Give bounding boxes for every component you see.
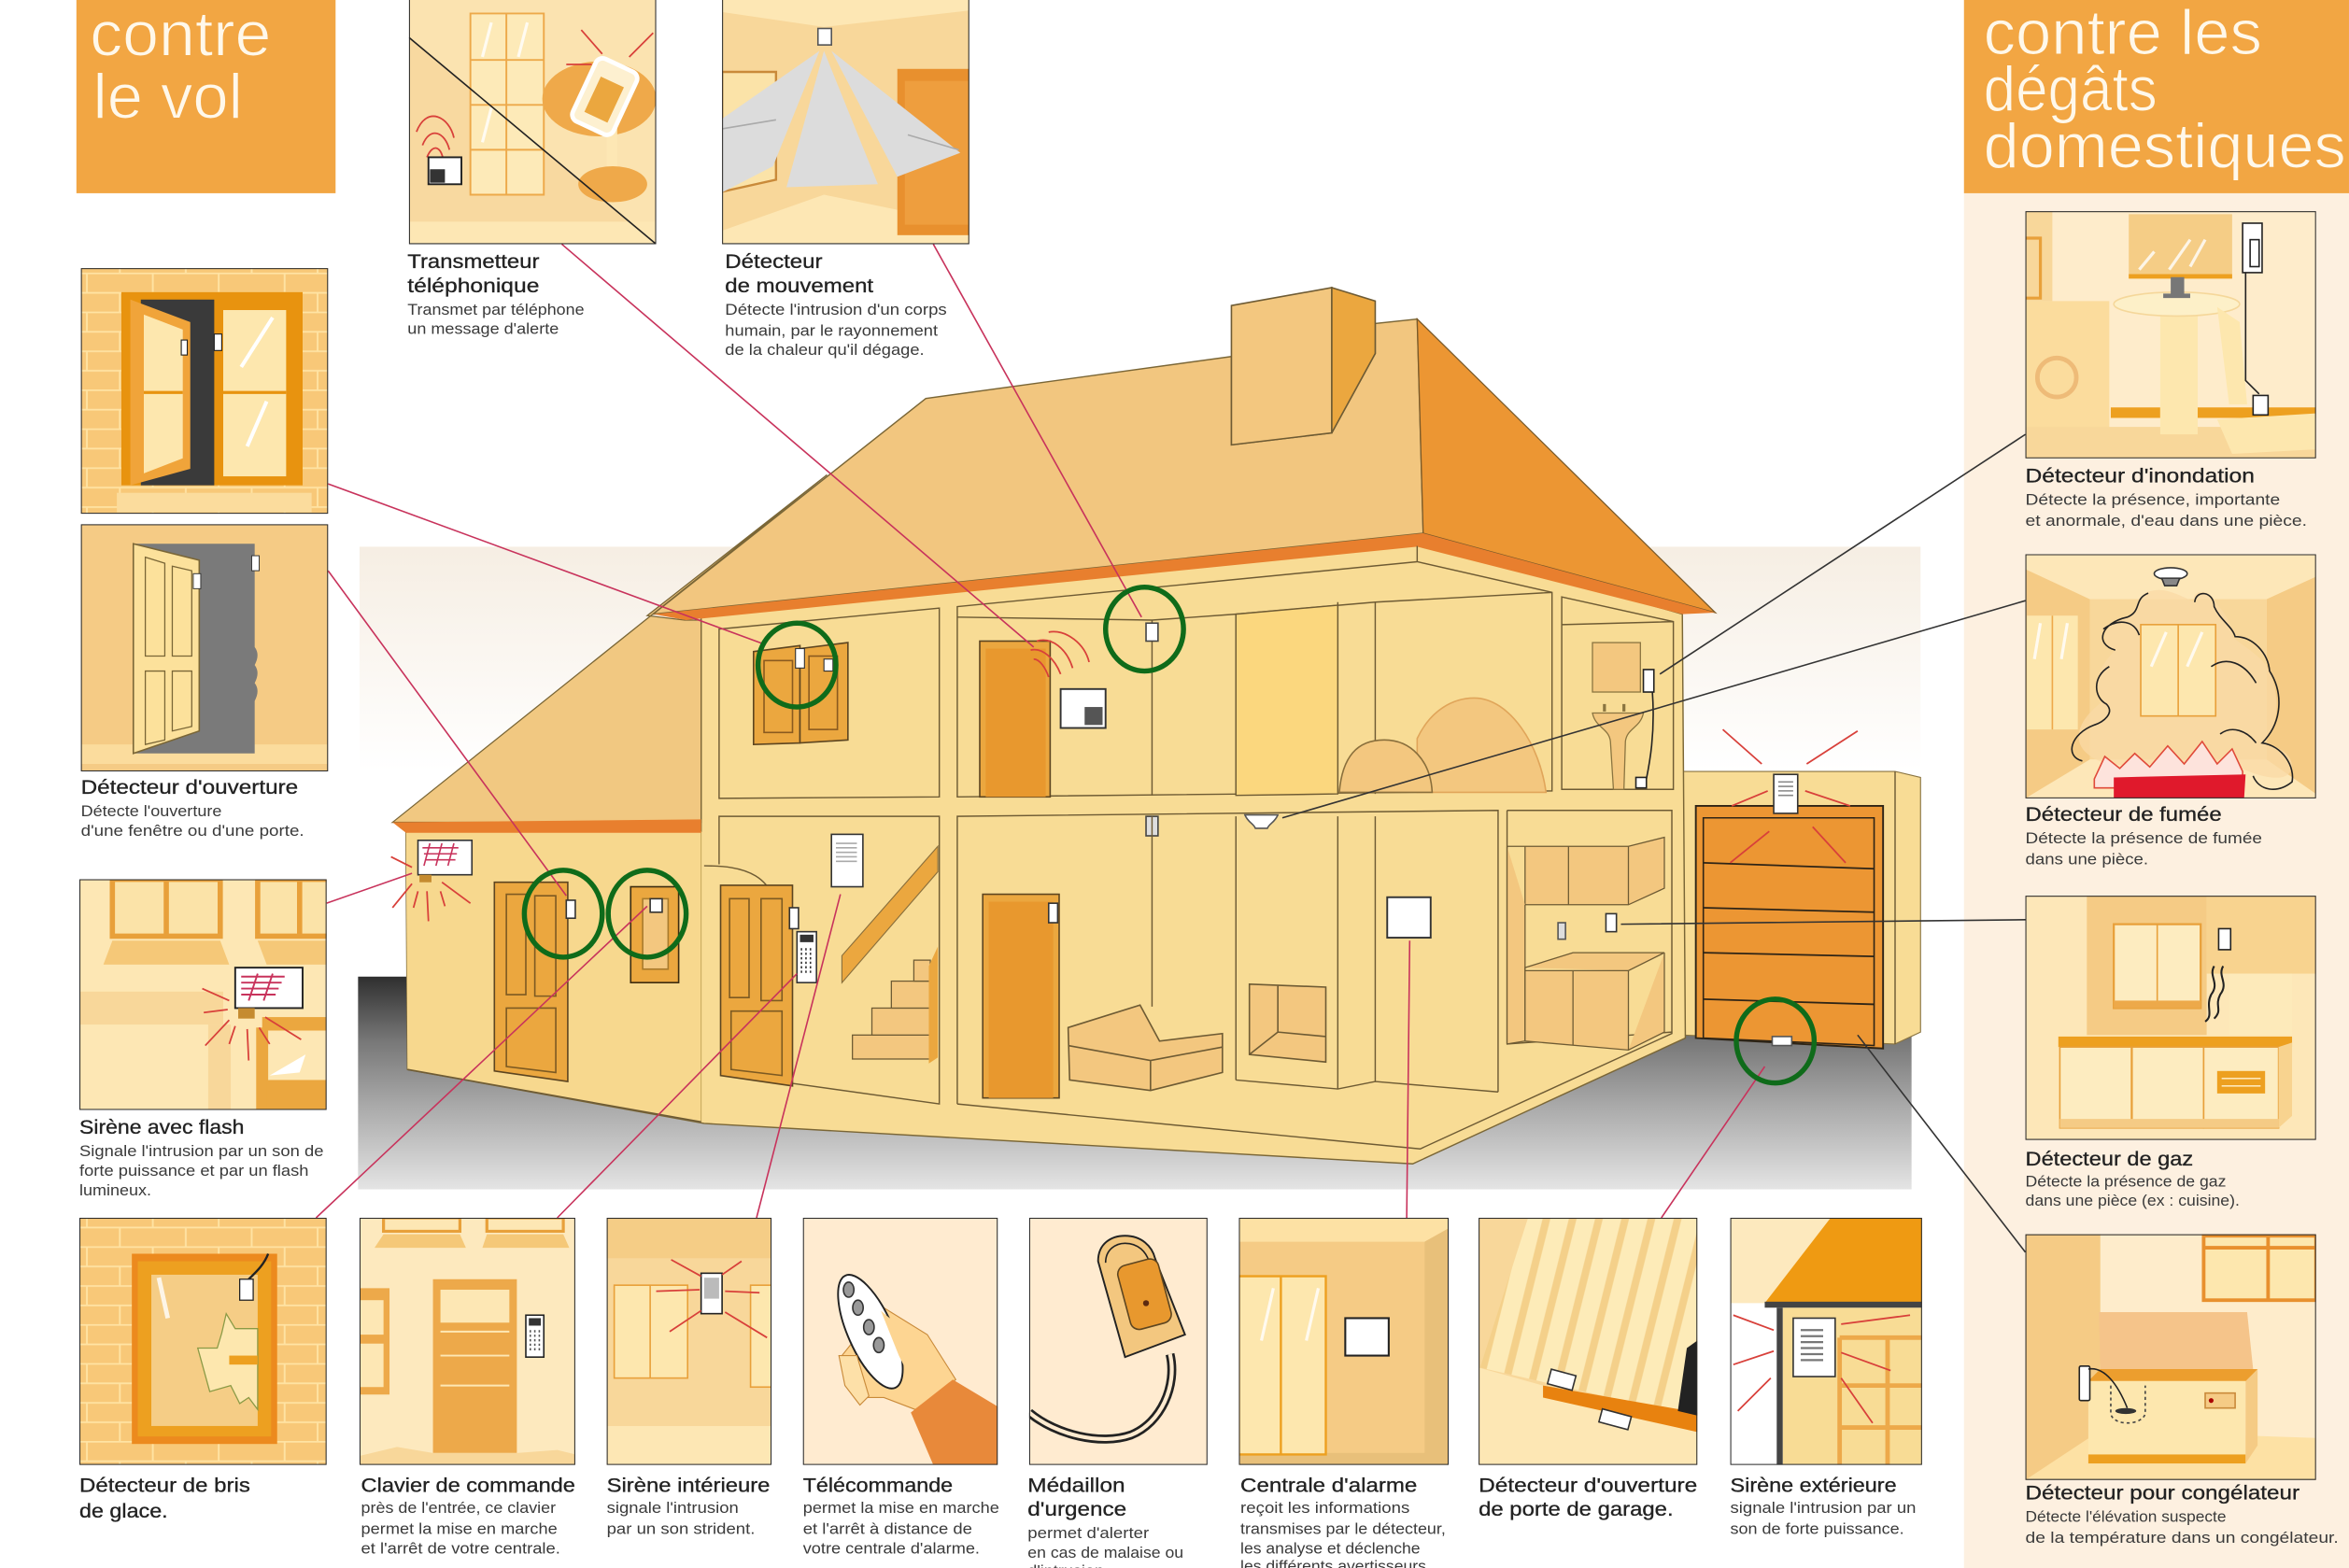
interior siren xyxy=(831,834,863,887)
garage door sensor xyxy=(1772,1037,1791,1046)
panel: médaillon d'urgence xyxy=(1029,1218,1208,1465)
gas detector xyxy=(1606,913,1617,932)
roof hip xyxy=(1417,319,1716,613)
text: détecteur de mouvement xyxy=(725,249,947,359)
text: porte de garage: de porte de garage. xyxy=(1479,1497,1674,1520)
text: télécommande: et l'arrêt à distance de xyxy=(803,1519,972,1537)
text: transmetteur téléphonique: Transmetteur xyxy=(407,249,539,273)
sofa xyxy=(1068,1005,1223,1091)
header: contre le vol: le vol xyxy=(92,63,243,133)
text: centrale d'alarme: transmises par le détecteur, xyxy=(1240,1519,1446,1537)
text: porte de garage: Détecteur d'ouverture xyxy=(1479,1474,1697,1497)
leader lines xyxy=(316,244,2026,1252)
text: sirène avec flash xyxy=(79,1115,323,1199)
text: détecteur de gaz xyxy=(2026,1147,2240,1209)
niche xyxy=(1250,984,1325,1062)
chimney xyxy=(1231,288,1375,445)
header: contre le vol: contre xyxy=(90,0,271,69)
smoke detector xyxy=(1245,815,1278,828)
text: détecteur de gaz: Détecteur de gaz xyxy=(2026,1147,2193,1170)
door sensors xyxy=(566,898,1057,928)
exterior siren with flash xyxy=(391,841,472,921)
text: centrale d'alarme: Centrale d'alarme xyxy=(1240,1474,1417,1497)
text: sirène intérieure: Sirène intérieure xyxy=(607,1474,770,1497)
small window xyxy=(630,887,679,982)
text: clavier de commande: permet la mise en marche xyxy=(361,1519,558,1537)
text: détecteur d'inondation xyxy=(2026,463,2307,530)
garage xyxy=(1682,729,1920,1049)
text: détecteur de fumée: dans une pièce. xyxy=(2026,850,2148,868)
text: détecteur de fumée: Détecte la présence de fumée xyxy=(2026,829,2262,847)
panel: porte de garage xyxy=(1479,1218,1698,1465)
stairs xyxy=(842,846,938,1064)
text: détecteur d'ouverture xyxy=(81,775,304,840)
panel: télécommande xyxy=(803,1218,998,1465)
main roof front xyxy=(653,319,1423,614)
panel: bris de glace xyxy=(79,1218,327,1465)
panel: porte ouverte xyxy=(80,524,329,771)
upper left window with sensors xyxy=(754,643,848,744)
panel: sirène extérieure xyxy=(1730,1218,1922,1465)
text: sirène avec flash: Signale l'intrusion par un son de xyxy=(79,1142,323,1160)
text: sirène extérieure: son de forte puissance. xyxy=(1731,1519,1904,1537)
text: détecteur pour congélateur xyxy=(2026,1481,2339,1547)
text: sirène extérieure: Sirène extérieure xyxy=(1731,1474,1897,1497)
text: télécommande: permet la mise en marche xyxy=(803,1499,999,1517)
panel: transmetteur téléphonique xyxy=(409,0,657,245)
text: centrale d'alarme xyxy=(1240,1474,1446,1568)
text: détecteur d'ouverture: Détecte l'ouverture xyxy=(81,802,221,820)
motion detector lower xyxy=(1146,816,1158,836)
text: sirène intérieure: signale l'intrusion xyxy=(607,1499,739,1517)
floor slab and lower rooms xyxy=(704,811,1672,1149)
text: bris de glace: Détecteur de bris xyxy=(79,1474,250,1497)
bathroom fixtures xyxy=(1592,643,1654,789)
kitchen sensor xyxy=(1558,923,1565,939)
text: détecteur de mouvement: Détecteur xyxy=(725,249,823,273)
text: sirène avec flash: forte puissance et par un flash xyxy=(79,1162,308,1180)
text: détecteur de mouvement: de la chaleur qu'il dégage. xyxy=(725,341,925,359)
text: bris de glace xyxy=(79,1474,250,1522)
text: sirène intérieure: par un son strident. xyxy=(607,1519,755,1537)
house illustration xyxy=(391,288,1920,1164)
panel: détecteur pour congélateur xyxy=(2025,1235,2316,1480)
text: détecteur d'inondation: Détecteur d'inondation xyxy=(2026,463,2255,487)
text: transmetteur téléphonique: un message d'alerte xyxy=(407,320,559,338)
right column background xyxy=(1964,193,2349,1568)
telephone transmitter xyxy=(1031,631,1106,728)
text: clavier de commande xyxy=(361,1474,575,1557)
panel: détecteur de gaz xyxy=(2025,896,2316,1140)
text: télécommande: votre centrale d'alarme. xyxy=(803,1539,980,1557)
front door 1 xyxy=(494,883,568,1081)
panel: sirène avec flash xyxy=(79,880,327,1109)
lower interior door xyxy=(983,895,1059,1098)
eave fascia xyxy=(653,533,1716,620)
alarm control panel xyxy=(1387,897,1431,938)
kitchen xyxy=(1507,838,1664,1050)
bed xyxy=(1339,698,1546,792)
text: centrale d'alarme: reçoit les informations xyxy=(1240,1499,1409,1517)
header: contre le vol xyxy=(77,0,335,193)
header: contre les dégâts domestiques: domestiques xyxy=(1984,112,2346,182)
upper door xyxy=(980,641,1050,797)
panel: détecteur de mouvement xyxy=(722,0,969,245)
text: médaillon d'urgence: Médaillon xyxy=(1027,1474,1125,1497)
walls xyxy=(406,539,1685,1164)
text: détecteur d'inondation: Détecte la présence, importante xyxy=(2026,491,2280,509)
panel: détecteur de fumée xyxy=(2025,555,2316,798)
text: détecteur de mouvement: de mouvement xyxy=(725,274,873,297)
panel: centrale d'alarme xyxy=(1238,1218,1450,1465)
backdrop band behind house xyxy=(360,546,1920,771)
text: sirène extérieure: signale l'intrusion par un xyxy=(1731,1499,1916,1517)
text: médaillon d'urgence: d'urgence xyxy=(1027,1497,1126,1520)
text: transmetteur téléphonique xyxy=(407,249,585,338)
panel: détecteur d'inondation xyxy=(2025,211,2316,459)
text: médaillon d'urgence xyxy=(1027,1474,1183,1568)
text: transmetteur téléphonique: téléphonique xyxy=(407,274,539,297)
exterior siren on garage xyxy=(1723,729,1858,863)
panel: clavier de commande xyxy=(359,1218,575,1465)
text: transmetteur téléphonique: Transmet par téléphone xyxy=(407,301,585,318)
text: bris de glace: de glace. xyxy=(79,1499,168,1522)
text: détecteur pour congélateur: Détecteur pour congélateur xyxy=(2026,1481,2299,1504)
panel: sirène intérieure xyxy=(607,1218,771,1465)
front door 2 xyxy=(721,885,792,1086)
text: clavier de commande: Clavier de commande xyxy=(361,1474,575,1497)
text: détecteur d'ouverture: d'une fenêtre ou d'une porte. xyxy=(81,822,304,840)
text: centrale d'alarme: les analyse et déclenche xyxy=(1240,1539,1421,1557)
text: détecteur pour congélateur: Détecte l'élévation suspecte xyxy=(2026,1508,2226,1526)
text: médaillon d'urgence: en cas de malaise ou xyxy=(1027,1544,1183,1561)
text: clavier de commande: près de l'entrée, ce clavier xyxy=(361,1499,557,1517)
text: détecteur de gaz: Détecte la présence de gaz xyxy=(2026,1172,2226,1190)
text: clavier de commande: et l'arrêt de votre centrale. xyxy=(361,1539,560,1557)
upper floor rooms xyxy=(719,546,1674,798)
text: sirène avec flash: Sirène avec flash xyxy=(79,1115,244,1138)
text: détecteur de gaz: dans une pièce (ex : cuisine). xyxy=(2026,1192,2240,1209)
keypad xyxy=(797,932,816,982)
text: sirène intérieure xyxy=(607,1474,770,1537)
text: détecteur d'ouverture: Détecteur d'ouverture xyxy=(81,775,298,798)
text: porte de garage xyxy=(1479,1474,1697,1520)
text: télécommande: Télécommande xyxy=(803,1474,953,1497)
motion detector upper xyxy=(1146,623,1158,641)
text: détecteur d'inondation: et anormale, d'eau dans une pièce. xyxy=(2026,512,2307,530)
text: détecteur de mouvement: Détecte l'intrusion d'un corps xyxy=(725,301,947,318)
ground gradient xyxy=(358,977,1912,1190)
text: détecteur pour congélateur: de la température dans un congélateur. xyxy=(2026,1529,2339,1547)
text: détecteur de fumée xyxy=(2026,802,2262,868)
lower left roof xyxy=(392,474,827,823)
panel: fenêtre ouverte xyxy=(80,268,329,514)
text: télécommande xyxy=(803,1474,999,1557)
text: détecteur de fumée: Détecteur de fumée xyxy=(2026,802,2222,826)
green highlight circles xyxy=(524,587,1814,1083)
header: contre les dégâts domestiques: dégâts xyxy=(1984,55,2158,125)
text: sirène extérieure xyxy=(1731,1474,1916,1537)
text: médaillon d'urgence: permet d'alerter xyxy=(1027,1524,1150,1542)
header: contre les dégâts domestiques xyxy=(1964,0,2349,193)
text: détecteur de mouvement: humain, par le rayonnement xyxy=(725,321,939,339)
text: sirène avec flash: lumineux. xyxy=(79,1181,151,1199)
